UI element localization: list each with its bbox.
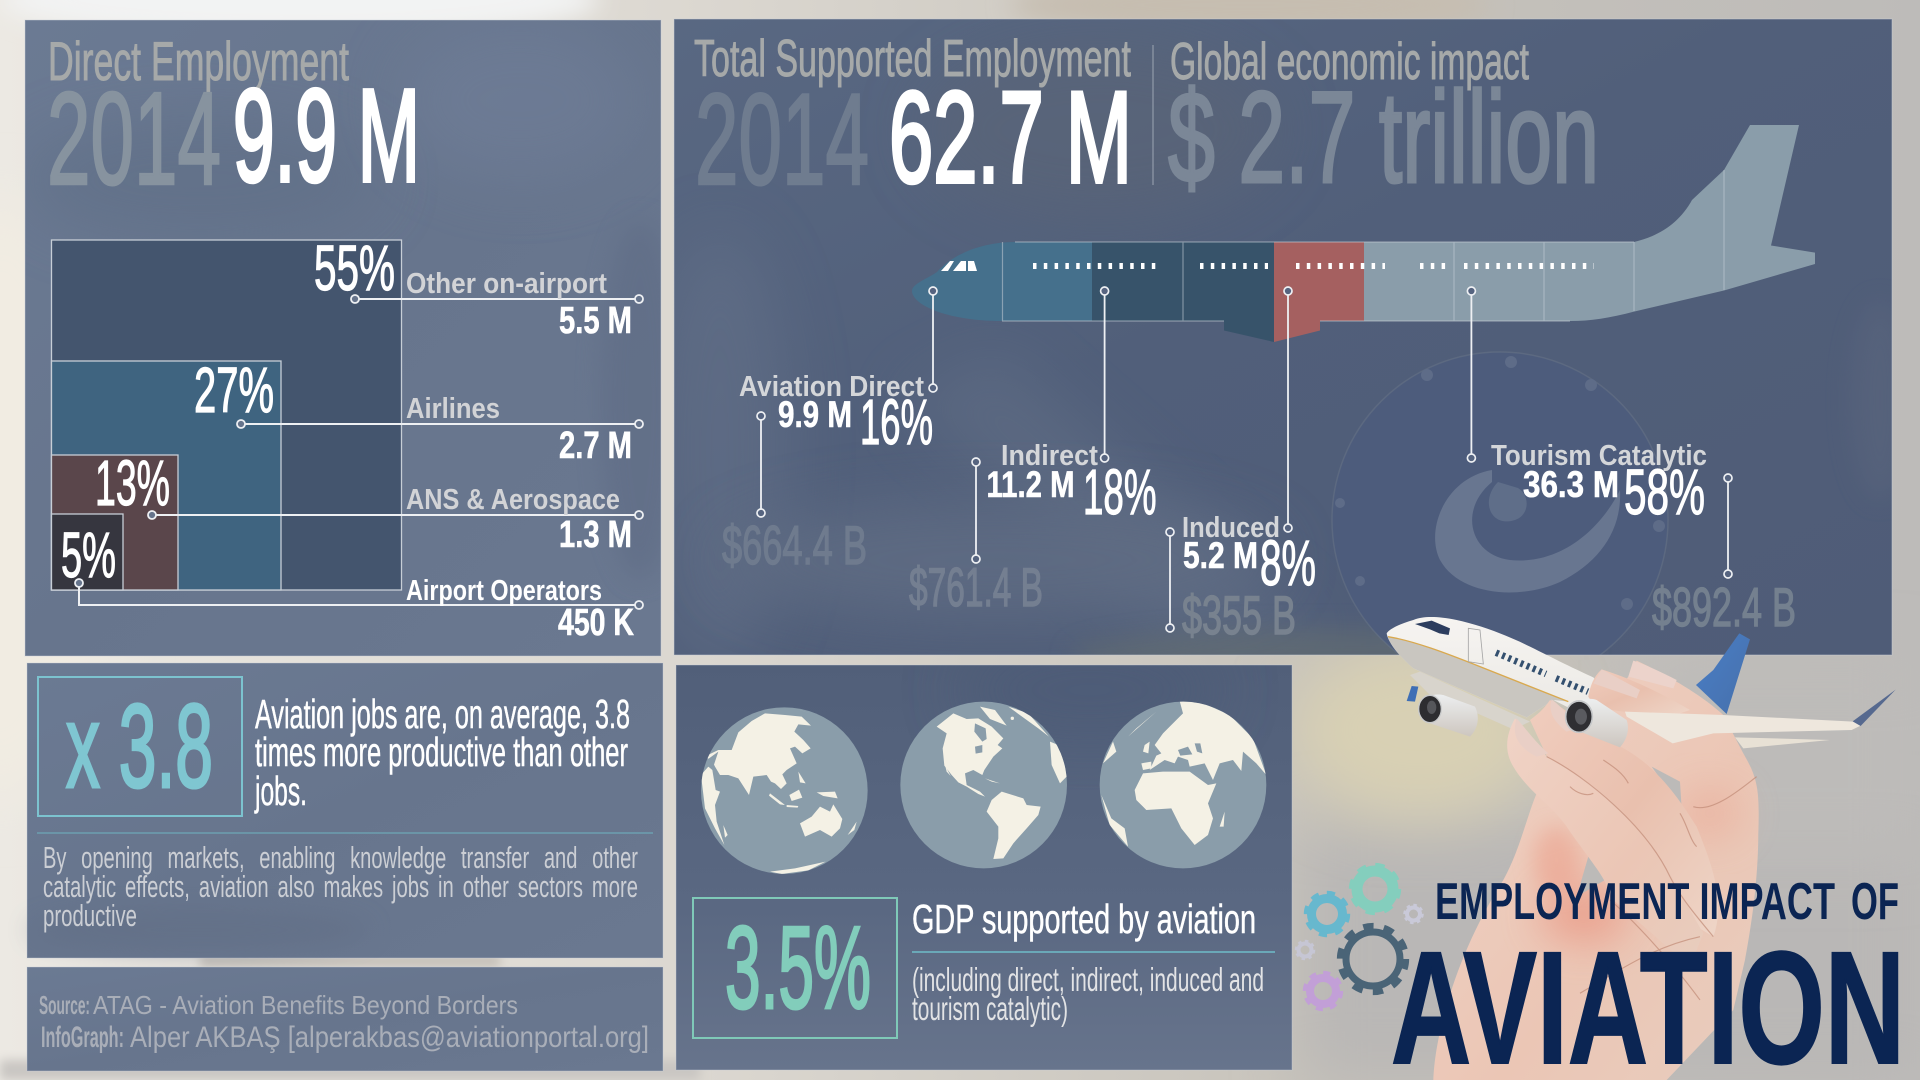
hand holding model aircraft bbox=[1387, 617, 1896, 1080]
indirect figures: 11.2 M bbox=[986, 464, 1074, 505]
globe: asia pacific bbox=[701, 707, 868, 874]
induced figures: $355 B bbox=[1182, 584, 1296, 646]
label other on-airport: Other on-airport bbox=[406, 268, 607, 300]
percent 13: 13% bbox=[95, 447, 170, 519]
catalytic effects paragraph: By opening markets, enabling knowledge transfer and other bbox=[43, 840, 638, 875]
productivity statement: Aviation jobs are, on average, 3.8 bbox=[255, 691, 630, 737]
label ans and aerospace: ANS & Aerospace bbox=[406, 484, 620, 516]
thumb nail bbox=[1628, 661, 1677, 688]
aviation direct figures: 16% bbox=[860, 386, 933, 458]
gear: purple bbox=[1305, 973, 1341, 1009]
value 3.5 percent: 3.5% bbox=[725, 902, 871, 1033]
finger creases bbox=[1547, 757, 1757, 1000]
gears bbox=[1296, 866, 1422, 1009]
globe: africa and europe bbox=[1100, 701, 1266, 868]
percent 27: 27% bbox=[194, 354, 274, 426]
title bbox=[1391, 873, 1905, 1080]
catalytic effects paragraph: productive bbox=[43, 898, 137, 933]
gaps between fingers bbox=[1577, 857, 1605, 897]
indirect figures bbox=[909, 440, 1156, 618]
gdp heading: GDP supported by aviation bbox=[912, 896, 1256, 942]
tail section: tourism catalytic bbox=[1364, 125, 1815, 321]
gear: slate bbox=[1341, 927, 1405, 991]
cabin windows bbox=[1033, 263, 1594, 269]
induced figures: Induced bbox=[1182, 512, 1280, 544]
value 2.7 M: 2.7 M bbox=[559, 425, 632, 467]
label airport operators: Airport Operators bbox=[406, 575, 602, 607]
tourism catalytic figures bbox=[1491, 440, 1796, 638]
label airlines: Airlines bbox=[406, 393, 500, 425]
3.5 percent box bbox=[693, 898, 897, 1038]
divider bbox=[1152, 45, 1154, 185]
indirect figures: 18% bbox=[1083, 456, 1156, 528]
panel: source credits bbox=[27, 967, 663, 1071]
aviation direct figures bbox=[722, 371, 933, 576]
gdp note bbox=[912, 961, 1264, 1027]
background swirl emblem bbox=[1332, 352, 1668, 688]
left wing bbox=[1410, 672, 1530, 729]
far finger bbox=[1588, 669, 1690, 713]
near engine bbox=[1566, 699, 1628, 747]
tourism catalytic figures: 58% bbox=[1624, 456, 1705, 528]
gear: faint right bbox=[1404, 905, 1422, 923]
value 62.7 M: 62.7 M bbox=[889, 64, 1132, 210]
belly bbox=[1388, 637, 1568, 717]
induced figures: 8% bbox=[1260, 527, 1316, 599]
panel: direct employment bbox=[20, 20, 680, 656]
infograph line: Alper AKBAŞ [alperakbas@aviationportal.org] bbox=[130, 1021, 649, 1054]
cockpit windows bbox=[941, 261, 977, 271]
heading: global economic impact: Global economic impact bbox=[1170, 33, 1529, 91]
panel: total supported employment bbox=[650, 19, 1910, 688]
infograph line: InfoGraph: bbox=[41, 1021, 124, 1054]
source line: ATAG - Aviation Benefits Beyond Borders bbox=[93, 990, 518, 1020]
indirect figures: $761.4 B bbox=[909, 556, 1043, 618]
tourism catalytic figures: 36.3 M bbox=[1523, 464, 1619, 505]
value 450 K: 450 K bbox=[558, 602, 634, 644]
globe: americas bbox=[900, 702, 1068, 868]
fuselage bbox=[1387, 617, 1613, 717]
percent 55: 55% bbox=[314, 232, 395, 304]
aviation direct figures: 9.9 M bbox=[778, 394, 852, 435]
section seams bbox=[1002, 170, 1724, 321]
year 2014: 2014 bbox=[47, 65, 221, 212]
nose section: aviation direct bbox=[912, 242, 1092, 321]
value 5.5 M: 5.5 M bbox=[559, 300, 632, 342]
finger two bbox=[1530, 700, 1718, 937]
gdp note: (including direct, indirect, induced and bbox=[912, 961, 1264, 998]
mid section: indirect bbox=[1092, 242, 1274, 342]
productivity statement bbox=[254, 691, 630, 814]
source line: Source: bbox=[39, 990, 90, 1020]
nested square chart bbox=[52, 240, 402, 590]
heading: total supported employment: Total Supported Employment bbox=[694, 30, 1131, 88]
value 2.7 trillion: $ 2.7 trillion bbox=[1168, 64, 1599, 210]
panel: productivity bbox=[27, 663, 663, 958]
catalytic effects paragraph bbox=[43, 840, 638, 933]
leader lines bbox=[75, 295, 643, 609]
induced figures bbox=[1182, 512, 1316, 646]
year 2014: 2014 bbox=[695, 66, 869, 212]
tail fin bbox=[1696, 633, 1750, 714]
door bbox=[1468, 628, 1483, 664]
percent 5: 5% bbox=[61, 519, 116, 591]
aircraft windows bbox=[1496, 653, 1588, 692]
productivity statement: jobs. bbox=[254, 768, 307, 814]
wing section: induced bbox=[1274, 242, 1364, 342]
x 3.8 box bbox=[38, 677, 242, 816]
gear: faint left bbox=[1296, 941, 1314, 959]
value x 3.8: x 3.8 bbox=[66, 680, 213, 813]
left engine bbox=[1418, 694, 1478, 737]
heading: direct employment: Direct Employment bbox=[48, 30, 349, 92]
induced figures: 5.2 M bbox=[1183, 535, 1258, 576]
aviation direct figures: $664.4 B bbox=[722, 514, 867, 576]
hand palm and thumb bbox=[1433, 661, 1759, 1080]
near wing bbox=[1625, 689, 1896, 743]
small rear tail bbox=[1407, 686, 1418, 702]
aviation direct figures: Aviation Direct bbox=[739, 371, 924, 403]
rear stabilizer bbox=[1735, 737, 1830, 748]
finger one bbox=[1507, 718, 1703, 967]
productivity statement: times more productive than other bbox=[255, 729, 628, 775]
panel background with blurred runway pattern bbox=[650, 19, 1910, 688]
value 1.3 M: 1.3 M bbox=[559, 514, 632, 556]
gdp note: tourism catalytic) bbox=[912, 990, 1068, 1027]
panel: gdp bbox=[676, 640, 1292, 1070]
gear: teal bbox=[1352, 866, 1398, 912]
pointer lines bbox=[757, 287, 1732, 632]
gear: blue bbox=[1306, 893, 1348, 935]
tourism catalytic figures: Tourism Catalytic bbox=[1491, 440, 1707, 472]
finger nails bbox=[1515, 699, 1577, 757]
panel background bbox=[20, 20, 680, 656]
catalytic effects paragraph: catalytic effects, aviation also makes jobs in other sectors more bbox=[43, 869, 638, 904]
indirect figures: Indirect bbox=[1001, 440, 1098, 472]
cockpit windows bbox=[1415, 621, 1450, 635]
aircraft segmented chart bbox=[912, 125, 1815, 342]
value 9.9 M: 9.9 M bbox=[233, 62, 420, 209]
tourism catalytic figures: $892.4 B bbox=[1652, 576, 1796, 638]
